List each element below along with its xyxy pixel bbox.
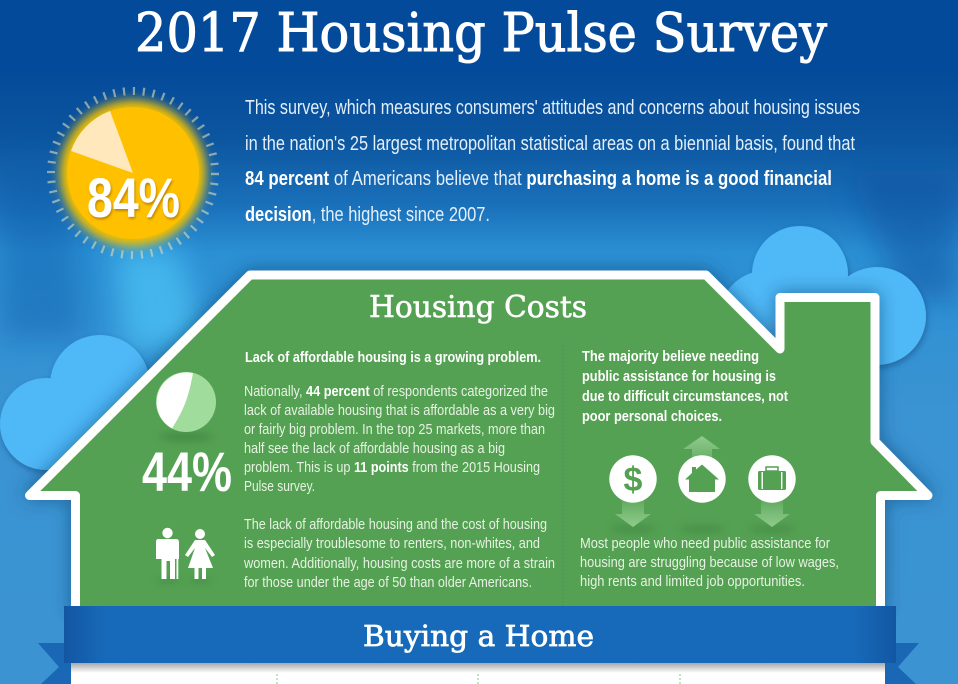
- panel: buying a home: [71, 663, 885, 684]
- left column paragraph one: problem. This is up 11 points from the 2015 Housing: [244, 459, 540, 476]
- title: 2017 Housing Pulse Survey: [135, 3, 827, 64]
- cloud: left: [0, 335, 166, 470]
- left column paragraph two: [243, 516, 555, 591]
- left column paragraph two: The lack of affordable housing and the cost of housing: [244, 516, 547, 533]
- panel: house housing costs: [30, 275, 928, 612]
- left column paragraph one: Pulse survey.: [244, 478, 315, 495]
- icon: dollar: $: [624, 461, 643, 499]
- stat: 44 percent: 44%: [142, 440, 232, 503]
- arrow: up above house: [683, 436, 720, 465]
- house outline: [30, 275, 928, 612]
- icon: elderly man and woman: [156, 528, 215, 584]
- right column heading: public assistance for housing is: [582, 368, 776, 385]
- left column paragraph one: or fairly big problem. In the top 25 markets, more than: [244, 421, 545, 438]
- sun rays: [51, 91, 215, 255]
- right column heading: The majority believe needing: [582, 348, 759, 365]
- icon row: wages, rents, jobs: [609, 436, 796, 533]
- intro text block: [245, 97, 860, 226]
- icon: pie chart 44 percent: [156, 372, 216, 442]
- column divider: [562, 345, 564, 606]
- intro text block: 84 percent of Americans believe that purchasing a home is a good financial: [245, 168, 832, 190]
- right column heading: [582, 348, 788, 425]
- right column paragraph: housing are struggling because of low wages,: [580, 554, 839, 571]
- right column paragraph: Most people who need public assistance for: [580, 535, 830, 552]
- left column paragraph two: is especially troublesome to renters, non-whites, and: [244, 535, 540, 552]
- arrow: down under briefcase: [754, 498, 790, 527]
- left column paragraph two: for those under the age of 50 than older Americans.: [244, 574, 532, 591]
- ribbon: buying a home heading: [64, 606, 896, 663]
- left column heading: Lack of affordable housing is a growing problem.: [245, 349, 541, 366]
- icon: house: [678, 455, 726, 503]
- left column paragraph one: half see the lack of affordable housing as a big: [244, 440, 505, 457]
- right column paragraph: high rents and limited job opportunities.: [580, 573, 805, 590]
- ribbon tails: [38, 643, 919, 684]
- sun percent label: 84%: [87, 166, 180, 229]
- ribbon: buying a home heading: Buying a Home: [363, 619, 594, 653]
- right column paragraph: [580, 535, 839, 590]
- left column paragraph one: [244, 383, 555, 495]
- left column paragraph one: lack of available housing that is affordable as a very big: [244, 402, 555, 419]
- icon: dollar: [609, 455, 657, 503]
- icon: sun with 84 percent: [51, 91, 215, 255]
- heading: housing costs: Housing Costs: [369, 290, 587, 325]
- left column paragraph two: women. Additionally, housing costs are more of a strain: [243, 555, 555, 572]
- pie slice: [71, 111, 133, 173]
- intro text block: decision, the highest since 2007.: [245, 204, 490, 226]
- arrow: down under dollar: [615, 498, 651, 527]
- right column heading: due to difficult circumstances, not: [582, 388, 788, 405]
- right column heading: poor personal choices.: [582, 408, 722, 425]
- icon: briefcase: [748, 455, 796, 503]
- cloud: right: [718, 226, 926, 370]
- left column paragraph one: Nationally, 44 percent of respondents categorized the: [244, 383, 548, 400]
